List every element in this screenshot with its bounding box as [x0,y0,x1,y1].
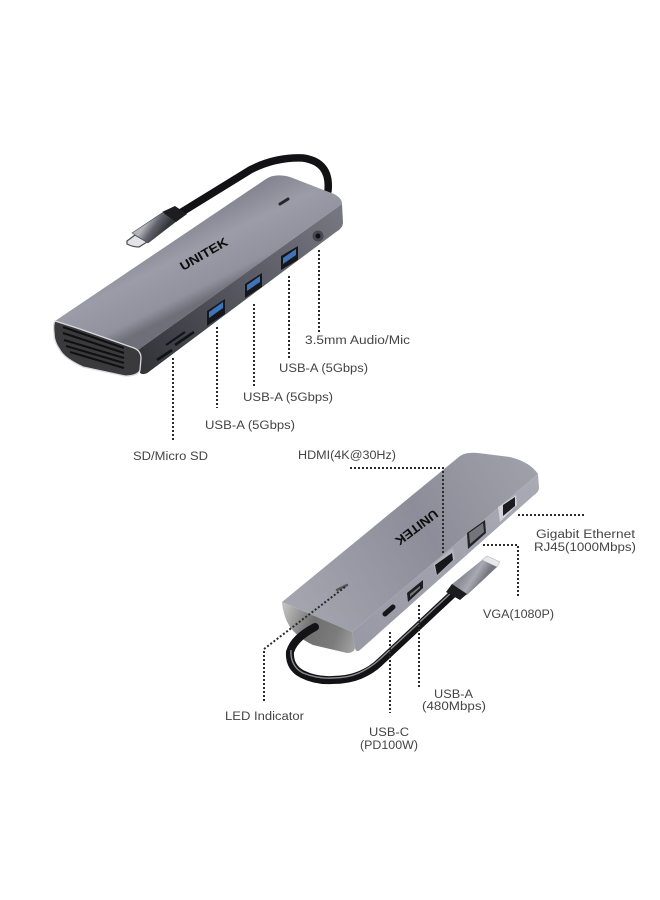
LED slot 2 [337,585,347,590]
hdmi port [433,548,455,576]
dotted leader: sd [172,358,174,440]
usb-a port [407,580,423,602]
usb-c plug 2 [446,556,500,600]
label: hdmi: HDMI(4K@30Hz) [298,450,396,462]
label: rj45: RJ45(1000Mbps) [534,542,636,554]
dotted leader: vga [483,545,518,597]
usb-c port [385,607,393,614]
label: usb-a 1: USB-A (5Gbps) [205,420,295,432]
label: led: LED Indicator [225,711,304,723]
dotted leader: usb-a 2 [253,304,255,387]
usb-a port 1 [207,299,225,326]
dotted leader: led [264,587,345,702]
sd slot [166,332,185,345]
dotted leader: usb-c [389,632,391,713]
label: usb-a: USB-A [434,689,473,701]
cable 1 [177,158,328,215]
LED slot 1 [280,199,288,204]
dotted leader: hdmi [350,468,443,555]
label: usb-c: USB-C [369,727,409,739]
usb-a port 2 [245,273,262,298]
label: usb-a 3: USB-A (5Gbps) [279,363,368,375]
dotted leader: usb-a 1 [216,327,218,408]
UNITEK logo 2: UNITEK [392,507,441,548]
label: sd: SD/Micro SD [133,451,208,463]
label: vga: VGA(1080P) [483,609,554,621]
label: usb-a 2: USB-A (5Gbps) [243,392,333,404]
cable 2 highlight [291,592,452,678]
dotted leader: usb-a 3 [288,276,290,358]
label: ethernet: Gigabit Ethernet [536,529,636,541]
hub 2 top face [282,453,538,632]
audio jack [312,230,324,242]
vga port [467,520,486,549]
label: 480mbps: (480Mbps) [422,701,486,713]
hub 2 end [282,602,355,653]
label: audio: 3.5mm Audio/Mic [305,335,410,347]
hub 1 front grille [54,321,141,376]
hub 2: bottom view product [282,453,539,680]
dotted leader: ethernet [518,514,585,516]
dotted leader: usb-a 480 [418,605,420,687]
hub 1 top face [55,175,342,350]
UNITEK logo 1: UNITEK [178,235,230,274]
cable 2 [290,590,457,680]
label: pd100w: (PD100W) [360,740,418,752]
rj45 port [498,495,517,522]
hub 2 side face [352,474,539,651]
hub 1: top view product [54,158,343,376]
usb-c plug 1 [127,206,187,247]
hub 1 side face [138,204,343,374]
dotted leader: audio [318,250,320,332]
usb-a port 3 [281,246,298,270]
micro sd slot [157,332,194,360]
